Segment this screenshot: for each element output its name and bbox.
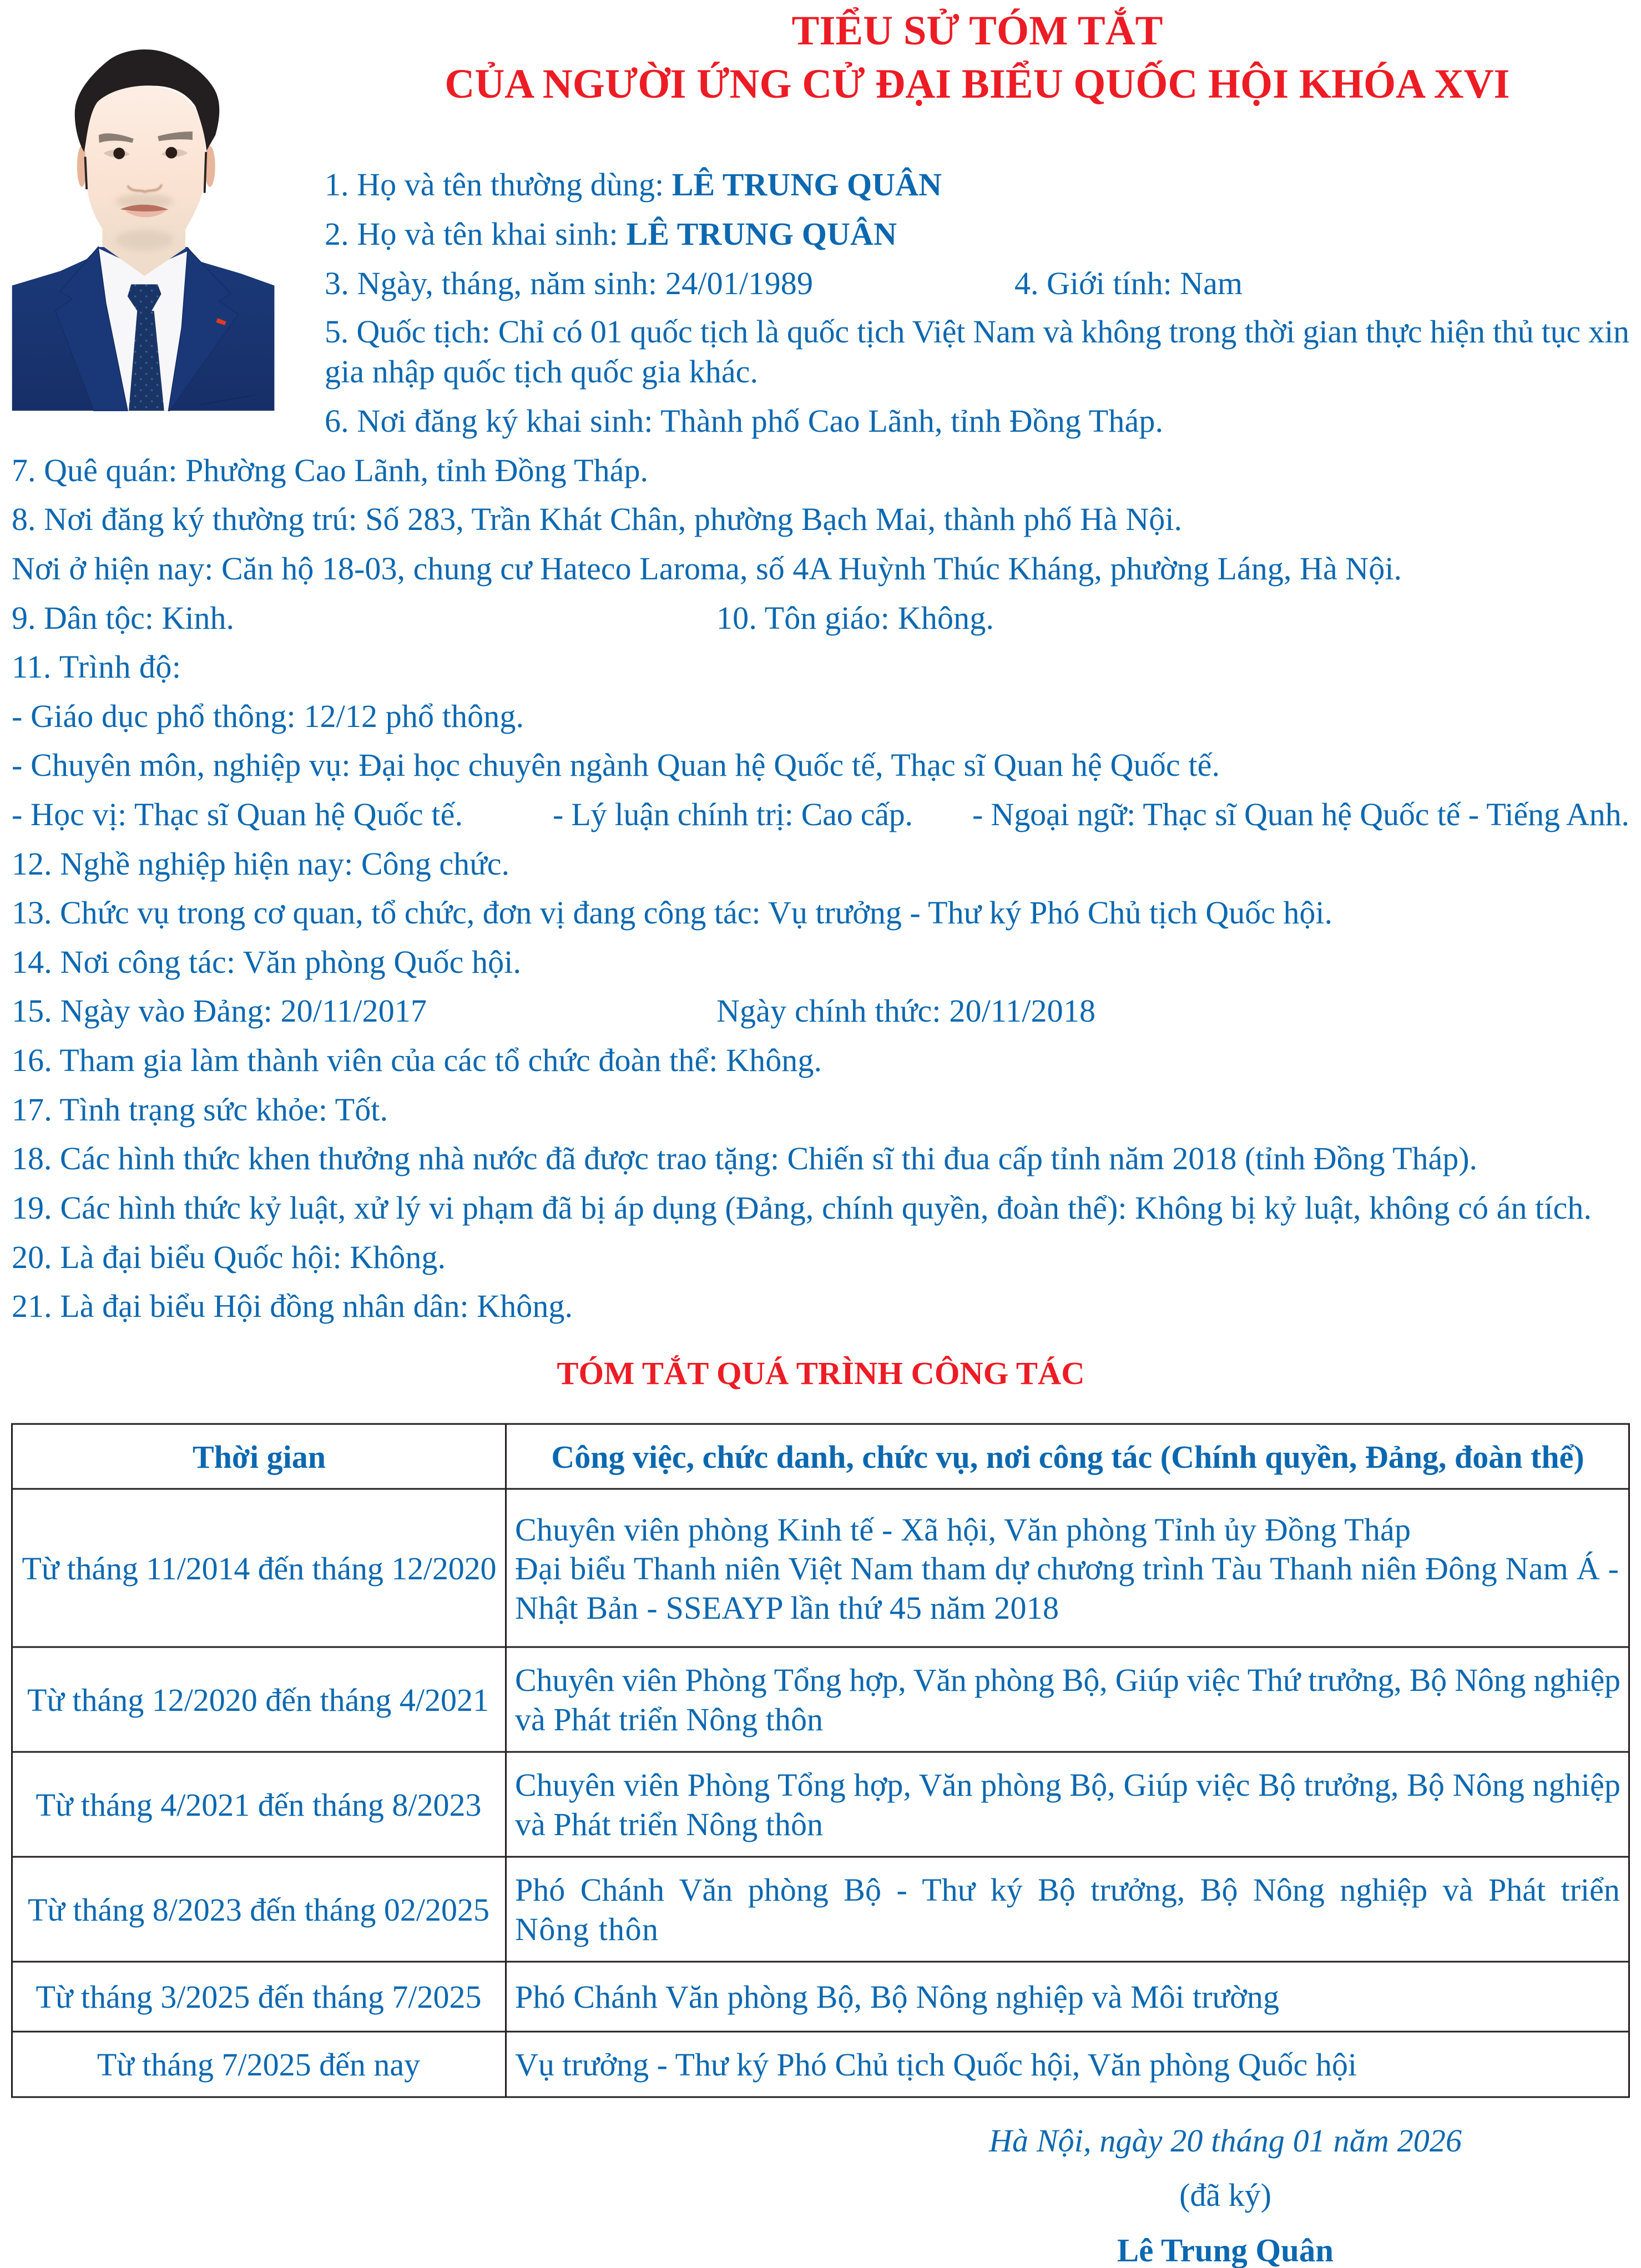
row 6 [97,2047,1357,2083]
item 21: 21. Là đại biểu Hội đồng nhân dân: Không. [12,1288,573,1324]
item 12: 12. Nghề nghiệp hiện nay: Công chức. [12,846,509,882]
row 1 [22,1512,1619,1626]
row 5: Phó Chánh Văn phòng Bộ, Bộ Nông nghiệp và Môi trường [515,1979,1279,2015]
row 2: Từ tháng 12/2020 đến tháng 4/2021 [27,1682,489,1718]
specialization: - Chuyên môn, nghiệp vụ: Đại học chuyên ngành Quan hệ Quốc tế, Thạc sĩ Quan hệ Quốc tế. [12,747,1220,783]
ears [77,146,87,187]
row 2 [27,1662,1620,1737]
item 17: 17. Tình trạng sức khỏe: Tốt. [12,1092,388,1128]
tie [128,284,164,411]
item 5: 5. Quốc tịch: Chỉ có 01 quốc tịch là quốc tịch Việt Nam và không trong thời gian thực hiện thủ tục xin [325,314,1629,350]
face [85,87,206,253]
item 20: 20. Là đại biểu Quốc hội: Không. [12,1239,446,1275]
signer name: Lê Trung Quân [1117,2232,1334,2268]
row 3 [36,1767,1620,1842]
row 2: và Phát triển Nông thôn [515,1701,823,1737]
row 6: Từ tháng 7/2025 đến nay [97,2047,420,2083]
row 3: Chuyên viên Phòng Tổng hợp, Văn phòng Bộ, Giúp việc Bộ trưởng, Bộ Nông nghiệp [515,1767,1620,1803]
item 18: 18. Các hình thức khen thưởng nhà nước đã được trao tặng: Chiến sĩ thi đua cấp tỉnh năm 2018 (tỉnh Đồng Tháp). [12,1140,1477,1176]
shirt [98,248,189,411]
row 4: Phó Chánh Văn phòng Bộ - Thư ký Bộ trưởng, Bộ Nông nghiệp và Phát triển [515,1872,1620,1908]
lapel pin [216,318,226,325]
sideburns [85,152,206,193]
row 4 [28,1872,1620,1947]
portrait photo [12,49,274,411]
suit [12,247,274,411]
eyes [103,147,188,159]
item 8: 8. Nơi đăng ký thường trú: Số 283, Trần Khát Chân, phường Bạch Mai, thành phố Hà Nội. [12,501,1182,537]
date line: Hà Nội, ngày 20 tháng 01 năm 2026 [988,2123,1462,2159]
foreign language: - Ngoại ngữ: Thạc sĩ Quan hệ Quốc tế - Tiếng Anh. [972,796,1629,832]
mouth [120,205,169,217]
signed note: (đã ký) [1179,2177,1271,2213]
item 13: 13. Chức vụ trong cơ quan, tổ chức, đơn vị đang công tác: Vụ trưởng - Thư ký Phó Chủ tịch Quốc hội. [12,895,1332,931]
item 9: 9. Dân tộc: Kinh. [12,600,234,636]
eyebrows [99,132,193,143]
item 2: 2. Họ và tên khai sinh: LÊ TRUNG QUÂN [325,216,897,252]
row 4: Nông thôn [515,1911,658,1947]
item 6: 6. Nơi đăng ký khai sinh: Thành phố Cao Lãnh, tỉnh Đồng Tháp. [325,403,1163,439]
table header: Công việc, chức danh, chức vụ, nơi công tác (Chính quyền, Đảng, đoàn thể) [551,1439,1584,1475]
title: CỦA NGƯỜI ỨNG CỬ ĐẠI BIỂU QUỐC HỘI KHÓA XVI [445,60,1510,107]
row 1: Từ tháng 11/2014 đến tháng 12/2020 [22,1550,496,1587]
table header: Thời gian [193,1439,326,1475]
item 14: 14. Nơi công tác: Văn phòng Quốc hội. [12,944,521,980]
personal details list: gia nhập quốc tịch quốc gia khác. [325,353,758,390]
political theory: - Lý luận chính trị: Cao cấp. [553,796,913,832]
work history table [12,1424,1629,2097]
title: TIỂU SỬ TÓM TẮT [792,7,1163,54]
row 2: Chuyên viên Phòng Tổng hợp, Văn phòng Bộ, Giúp việc Thứ trưởng, Bộ Nông nghiệp [515,1662,1620,1698]
item 1: 1. Họ và tên thường dùng: LÊ TRUNG QUÂN [325,166,942,203]
official date: Ngày chính thức: 20/11/2018 [716,993,1095,1029]
hair [75,49,219,152]
general education: - Giáo dục phổ thông: 12/12 phổ thông. [12,698,524,734]
degree: - Học vị: Thạc sĩ Quan hệ Quốc tế. [12,796,463,832]
section heading: TÓM TẮT QUÁ TRÌNH CÔNG TÁC [557,1355,1085,1391]
item 16: 16. Tham gia làm thành viên của các tổ chức đoàn thể: Không. [12,1042,822,1078]
current residence: Nơi ở hiện nay: Căn hộ 18-03, chung cư Hateco Laroma, số 4A Huỳnh Thúc Kháng, phường Láng, Hà Nội. [12,550,1402,587]
row 1: Chuyên viên phòng Kinh tế - Xã hội, Văn phòng Tỉnh ủy Đồng Tháp [515,1512,1411,1548]
row 1: Đại biểu Thanh niên Việt Nam tham dự chương trình Tàu Thanh niên Đông Nam Á - [515,1550,1619,1587]
row 3: Từ tháng 4/2021 đến tháng 8/2023 [36,1787,482,1823]
item 19: 19. Các hình thức kỷ luật, xử lý vi phạm đã bị áp dụng (Đảng, chính quyền, đoàn thể): Không bị kỷ luật, không có án tích. [12,1190,1592,1226]
stubble [115,194,173,250]
row 5 [36,1979,1279,2015]
nose [128,184,161,192]
item 10: 10. Tôn giáo: Không. [716,600,994,636]
signature block [988,2123,1462,2268]
right lapel [169,248,238,411]
row 3: và Phát triển Nông thôn [515,1806,823,1842]
item 4: 4. Giới tính: Nam [1014,265,1243,301]
row 1: Nhật Bản - SSEAYP lần thứ 45 năm 2018 [515,1590,1059,1626]
personal details list [12,166,1629,1324]
row 4: Từ tháng 8/2023 đến tháng 02/2025 [28,1892,489,1928]
item 15: 15. Ngày vào Đảng: 20/11/2017 [12,993,427,1029]
table grid [12,1424,1629,2097]
pocket [200,395,255,405]
row 6: Vụ trưởng - Thư ký Phó Chủ tịch Quốc hội, Văn phòng Quốc hội [515,2047,1357,2083]
item 7: 7. Quê quán: Phường Cao Lãnh, tỉnh Đồng Tháp. [12,452,648,488]
title [445,7,1510,107]
row 5: Từ tháng 3/2025 đến tháng 7/2025 [36,1979,482,2015]
item 11: 11. Trình độ: [12,649,181,685]
item 3: 3. Ngày, tháng, năm sinh: 24/01/1989 [325,265,813,301]
left lapel [55,247,128,411]
neck [102,224,185,276]
